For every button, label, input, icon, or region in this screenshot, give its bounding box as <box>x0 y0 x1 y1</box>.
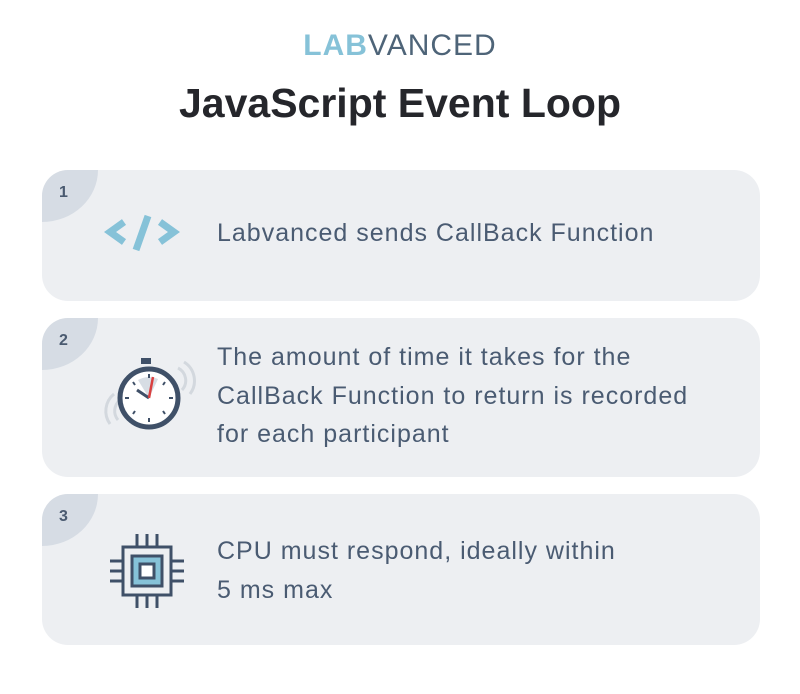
number tab 1 <box>42 170 98 222</box>
text 1: Labvanced sends CallBack Function <box>217 219 654 247</box>
panel: step 2 <box>42 318 760 477</box>
icon: code <box>104 214 180 252</box>
number tab 2 <box>42 318 98 370</box>
icon: stopwatch <box>104 358 196 430</box>
text 2: CallBack Function to return is recorded <box>217 382 688 410</box>
icon: cpu chip <box>110 534 184 608</box>
panel: step 3 <box>42 494 760 645</box>
panel: step 1 <box>42 170 760 301</box>
text 2: The amount of time it takes for the <box>217 343 631 371</box>
logo: LABVANCED <box>303 29 497 62</box>
number tab 3: 3 <box>59 508 68 525</box>
number tab 3 <box>42 494 98 546</box>
text 3: CPU must respond, ideally within <box>217 537 616 565</box>
number tab 2: 2 <box>59 332 68 349</box>
number tab 1: 1 <box>59 184 68 201</box>
text 3: 5 ms max <box>217 576 333 604</box>
title: JavaScript Event Loop <box>179 80 621 126</box>
text 3 <box>217 537 616 604</box>
text 2: for each participant <box>217 420 450 448</box>
text 2 <box>217 343 688 448</box>
